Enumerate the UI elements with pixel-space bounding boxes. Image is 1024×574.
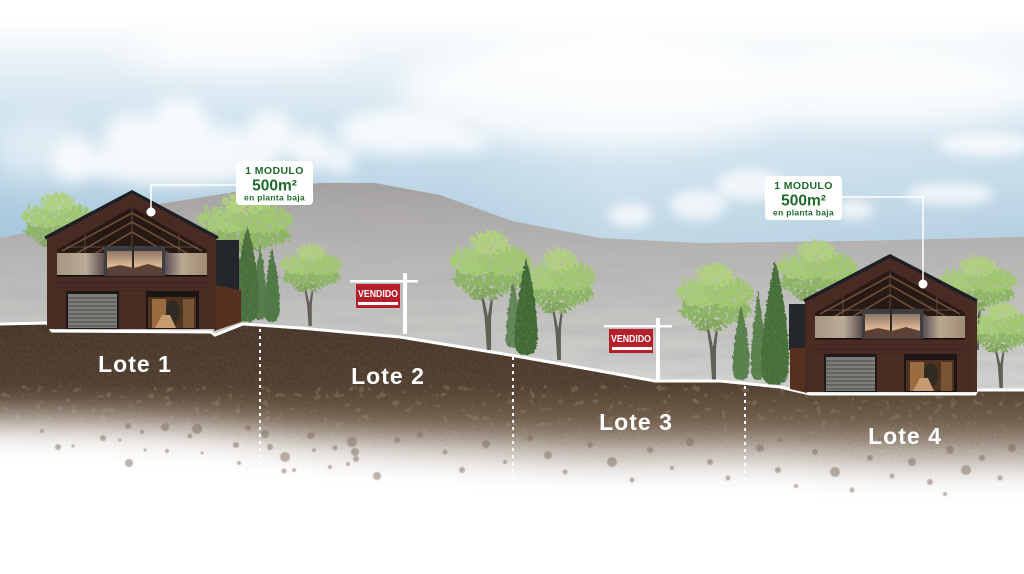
callout: modulo lote 4: 1 MODULO: [774, 180, 833, 192]
callout: modulo lote 1: 1 MODULO: [245, 165, 304, 177]
callout: modulo lote 1: en planta baja: [244, 192, 305, 202]
callout: modulo lote 4: en planta baja: [773, 208, 834, 218]
mountains: [0, 183, 1024, 400]
trees: lote 1: [22, 193, 341, 326]
soil: [0, 324, 1024, 496]
sign: vendido lote 3: [604, 318, 672, 380]
ground line: [0, 323, 1024, 394]
trees: lote 2: [450, 231, 595, 360]
callout: modulo lote 1: 500m²: [252, 178, 297, 194]
sign: vendido lote 3: VENDIDO: [611, 334, 651, 345]
lot dividers: [260, 329, 745, 510]
callout: modulo lote 4: [765, 176, 928, 288]
label: lote 1: Lote 1: [98, 351, 172, 377]
sign: vendido lote 2: VENDIDO: [358, 289, 398, 300]
house lote 4: [789, 256, 977, 393]
clouds: [0, 30, 1024, 227]
label: lote 2: Lote 2: [351, 363, 425, 389]
trees: lote 3 and 4: [677, 241, 1024, 388]
soil speckles: [40, 423, 1016, 496]
label: lote 4: Lote 4: [868, 423, 942, 449]
lot labels: [98, 351, 942, 449]
house lote 1: [45, 192, 241, 331]
callout: modulo lote 1: [146, 161, 313, 216]
background sky: [0, 0, 1024, 330]
label: lote 3: Lote 3: [599, 409, 673, 435]
sign: vendido lote 2: [350, 273, 418, 334]
callout: modulo lote 4: 500m²: [781, 192, 826, 210]
